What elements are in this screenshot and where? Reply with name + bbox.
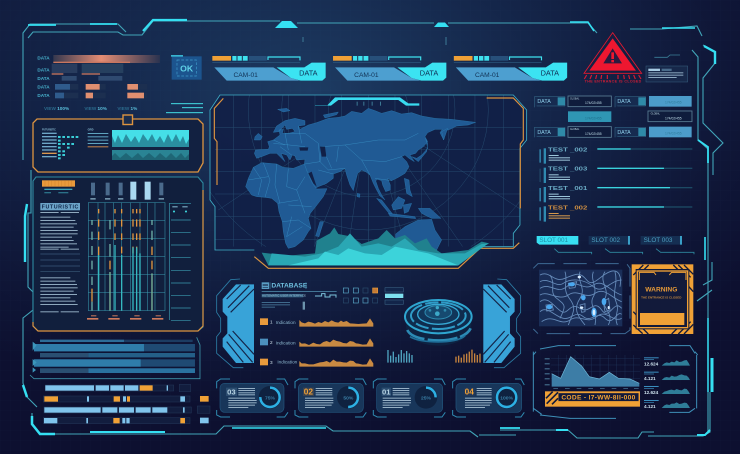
card 03: 75% [265, 395, 276, 401]
panel: area chart with code: 12.624 [644, 362, 659, 367]
card 04 [453, 379, 524, 417]
panel: area chart with code: 4.121 [644, 376, 656, 381]
gauge cards [217, 379, 524, 417]
data cells: 174/02/455 [665, 100, 682, 104]
slot tabs: SLOT 003 [644, 237, 673, 244]
panel: waveform (orange): GRID [88, 129, 94, 131]
data cells: 174/02/455 [585, 116, 602, 120]
panel: data readouts: VIEW 10% [84, 106, 108, 111]
hexagon side panels [217, 279, 521, 368]
card 01: 01 [382, 387, 391, 396]
info note [646, 55, 688, 82]
Eurasia and Africa [246, 108, 476, 250]
data cells: 174/02/455 [585, 132, 602, 136]
cell group: DATA [537, 130, 551, 136]
panel: futuristic table [33, 177, 203, 331]
row: TEST_002 orange: TEST _002 [548, 205, 587, 211]
card 03 [217, 379, 288, 417]
panel: data readouts: DATA [37, 76, 50, 81]
small squares [343, 288, 368, 303]
slot tabs: SLOT 002 [591, 237, 621, 244]
cell group: DATA [617, 99, 631, 105]
cell group: DATA [617, 130, 631, 136]
panel: hex right [483, 279, 521, 368]
chip: CAM-01 left [212, 56, 326, 81]
panel: data readouts: DATA [37, 55, 50, 60]
map frame [210, 95, 527, 250]
panel: hex left [217, 279, 254, 368]
panel: database [260, 282, 480, 367]
country borders [248, 126, 418, 237]
panel: data readouts: DATA [37, 67, 50, 72]
icon: OK badge: OK [180, 63, 194, 73]
card 03: 03 [227, 387, 236, 396]
indication rows [260, 318, 298, 365]
slider rows [43, 384, 210, 424]
chip: CAM-01 right [454, 56, 567, 81]
chip: CAM-01 centre: CAM-01 [354, 72, 379, 79]
panel: horizontal bars [30, 337, 200, 379]
icon: red warning triangle [584, 33, 642, 84]
data cells: GLOBAL [570, 128, 580, 131]
small stacked lines [166, 103, 203, 113]
top trapezoid markers [275, 21, 449, 28]
panel: area chart with code: 12.624 [644, 390, 659, 395]
small ticks [303, 37, 446, 45]
panel: data readouts: DATA [37, 85, 50, 90]
indication rows: Indication [277, 360, 298, 365]
data cells: 174/02/455 [585, 101, 602, 105]
seas [299, 147, 326, 187]
chips: camera headers [212, 56, 567, 81]
panel: area chart with code: CODE - I7-WW-8II-000 [561, 394, 636, 401]
map graticule [210, 95, 522, 246]
data cells: 174/02/455 [665, 116, 682, 120]
panel: warning sign [632, 264, 693, 334]
cell group: DATA [537, 99, 551, 105]
chip: CAM-01 left: DATA [299, 69, 318, 78]
icon: red warning triangle: THE ENTRANCE IS CLOSED [585, 80, 642, 84]
panel: world map [210, 94, 528, 269]
row: TEST_001: TEST _001 [548, 186, 587, 192]
chip: CAM-01 centre: DATA [420, 69, 438, 78]
panel: waveform (orange) [33, 115, 203, 172]
panel: warning sign: THE ENTRANCE IS CLOSED [641, 296, 682, 300]
data cells: 174/02/455 [665, 131, 682, 135]
indication rows: 2 [270, 340, 273, 345]
panel: data readouts [37, 55, 160, 111]
panel: area chart with code: 4.121 [644, 404, 656, 409]
chip: CAM-01 right: CAM-01 [475, 72, 500, 79]
slot tabs [537, 236, 694, 254]
indication rows: 1 [270, 320, 273, 325]
indication rows: Indication [276, 320, 296, 325]
card 01: 25% [421, 395, 432, 401]
card 02 [295, 379, 366, 417]
card 02: 02 [304, 386, 313, 396]
chip: CAM-01 centre [333, 56, 446, 81]
cell group [534, 97, 646, 137]
small bar charts [388, 350, 412, 363]
panel: warning sign: WARNING [645, 287, 677, 294]
panel: waveform (orange): FUTURISTIC [42, 129, 56, 131]
chip: CAM-01 right: DATA [541, 69, 559, 78]
indication rows: Indication [276, 341, 296, 346]
card 04: 100% [500, 395, 514, 401]
panel: database: DATABASE [271, 283, 308, 290]
panel: futuristic table: FUTURISTIC [42, 204, 78, 210]
chip: CAM-01 left: CAM-01 [233, 72, 258, 79]
card 02: 50% [343, 395, 354, 401]
row: TEST_003: TEST _003 [548, 167, 587, 173]
slot tabs: SLOT 001 [539, 237, 569, 244]
data cells [534, 96, 692, 137]
card 04: 04 [465, 386, 474, 396]
panel: topographic map [533, 264, 630, 334]
icon: OK badge [171, 55, 202, 80]
area chart [262, 227, 489, 265]
row: TEST_002: TEST _002 [548, 147, 587, 153]
data cells: GLOBAL [570, 97, 580, 100]
panel: database: AUTOMATIC USER INTERFACE [262, 294, 306, 298]
panel: area chart with code [533, 346, 698, 418]
indication rows: 3 [270, 360, 273, 365]
panel: data readouts: VIEW 100% [44, 106, 70, 111]
icon: hub dial [405, 300, 472, 346]
panel: data readouts: VIEW 1% [117, 106, 138, 111]
panel: data readouts: DATA [37, 93, 50, 98]
data cells: GLOBAL [651, 113, 661, 116]
test rows [539, 147, 692, 222]
card 01 [373, 379, 445, 417]
